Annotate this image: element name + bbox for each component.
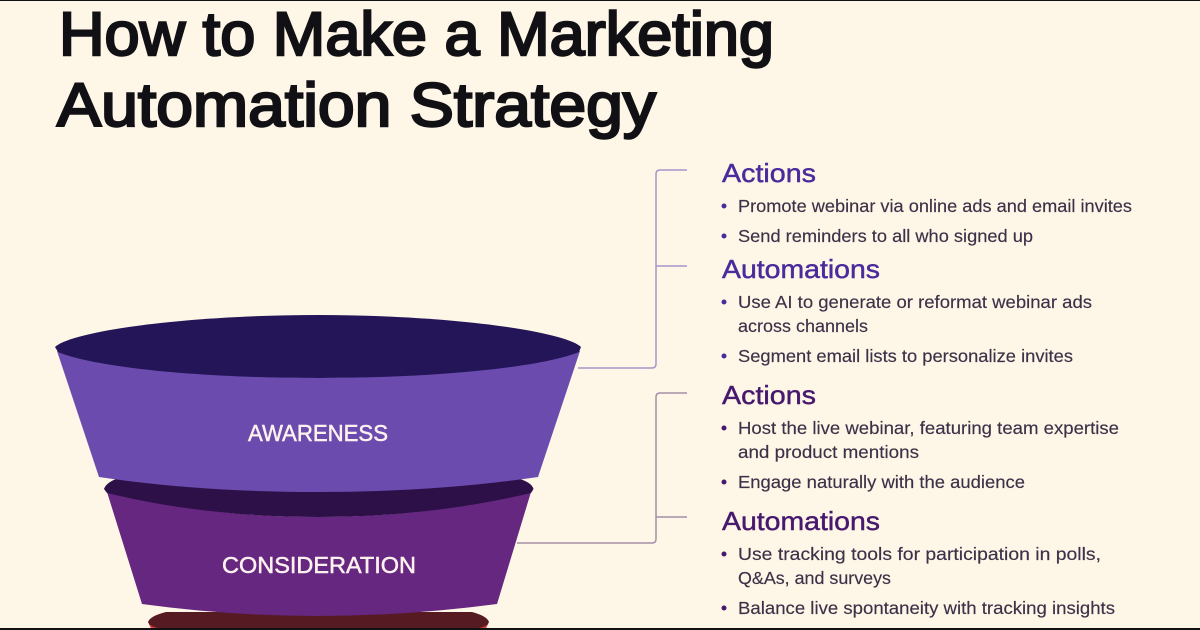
heading: automations: Automations xyxy=(722,506,880,536)
label: awareness: AWARENESS xyxy=(248,420,388,446)
text block: awareness automations: across channels xyxy=(738,316,868,336)
text block: awareness automations xyxy=(722,254,1092,366)
heading: automations: Automations xyxy=(722,254,880,284)
text block: consideration actions xyxy=(722,380,1119,492)
text block: awareness actions xyxy=(722,158,1132,246)
text block: awareness automations: Use AI to generate or reformat webinar ads xyxy=(738,292,1092,312)
title xyxy=(57,0,774,139)
text block: awareness automations: Segment email lists to personalize invites xyxy=(738,346,1073,366)
text block: consideration actions: and product mentions xyxy=(738,442,919,462)
text block: consideration automations: Use tracking tools for participation in polls, xyxy=(738,544,1101,564)
text block: awareness actions: Promote webinar via online ads and email invites xyxy=(738,196,1132,216)
heading: actions: Actions xyxy=(722,158,816,188)
funnel tier: bottom stage (cropped) xyxy=(148,612,489,628)
connector: consideration bracket xyxy=(517,393,687,543)
text block: consideration automations xyxy=(722,506,1115,618)
text block: awareness actions: Send reminders to all who signed up xyxy=(738,226,1033,246)
heading: actions: Actions xyxy=(722,380,816,410)
funnel tier: awareness xyxy=(55,315,581,492)
connector: awareness bracket xyxy=(578,170,687,368)
label: consideration: CONSIDERATION xyxy=(222,552,416,578)
title: How to Make a Marketing xyxy=(59,0,774,68)
text block: consideration automations: Q&As, and surveys xyxy=(738,568,891,588)
text block: consideration automations: Balance live spontaneity with tracking insights xyxy=(738,598,1115,618)
funnel tier: consideration xyxy=(104,479,534,616)
title: Automation Strategy xyxy=(57,71,657,139)
text block: consideration actions: Engage naturally with the audience xyxy=(738,472,1025,492)
text block: consideration actions: Host the live webinar, featuring team expertise xyxy=(738,418,1119,438)
funnel xyxy=(55,315,581,628)
